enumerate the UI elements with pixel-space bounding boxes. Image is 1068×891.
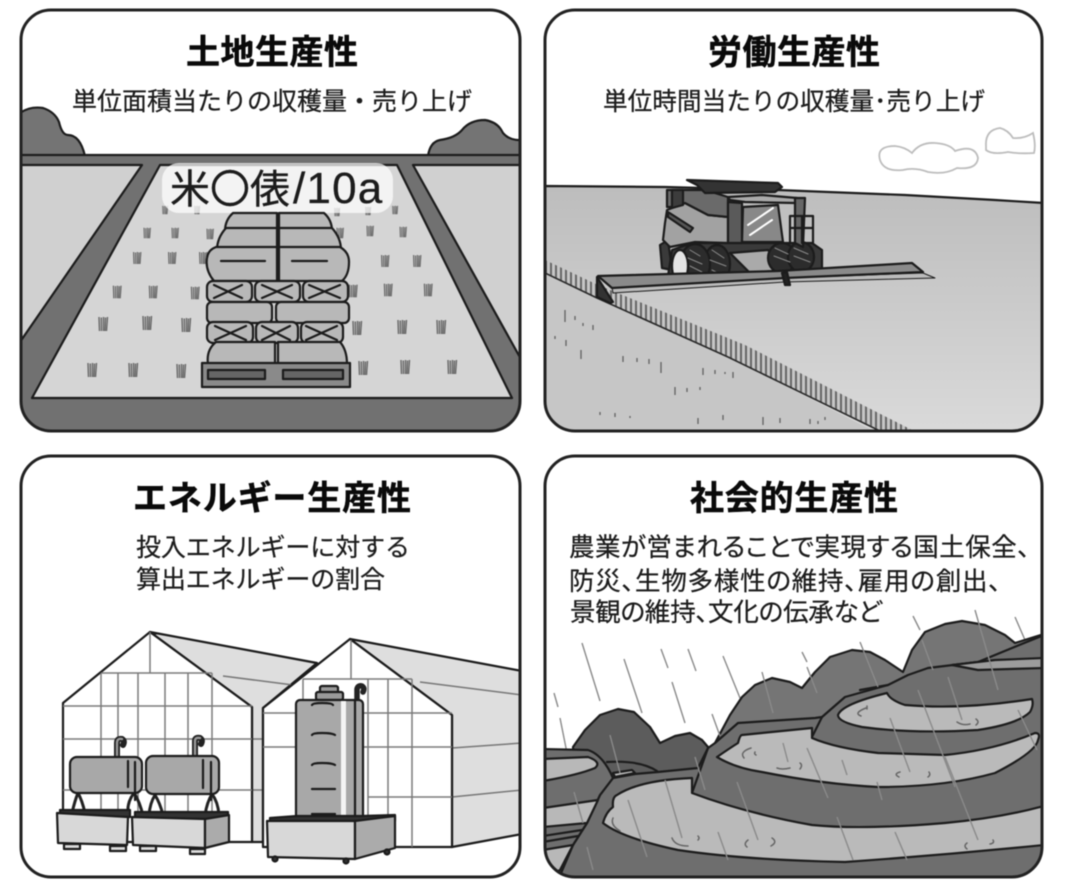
label: rice bales per 10a: 米〇俵 [170,168,290,212]
combine harvester [597,180,935,303]
rain behind hills [554,616,1025,763]
middle paddy [717,728,1039,787]
upper terrace sliver [952,658,1044,670]
icon: left tree bush [20,108,85,156]
tall fuel tank [267,686,395,864]
left paddy upper [543,757,597,781]
field [544,186,1044,434]
description: land productivity: 単位面積当たりの収穫量・売り上げ [72,88,472,116]
label background [162,163,393,213]
ground [20,155,522,433]
stubble edge [545,260,912,430]
icon: right tree bush [428,120,522,156]
description: energy productivity: 投入エネルギーに対する [136,534,410,562]
left greenhouse [63,632,317,842]
description: labor productivity: 単位時間当たりの収穫量･売り上げ [603,88,985,116]
left frame [660,240,672,270]
panel frame [21,456,520,877]
fuel tank centre [132,738,229,854]
illustration: greenhouses with fuel tanks [57,632,522,864]
right greenhouse [263,639,522,847]
panel: land productivity [20,10,522,433]
left paddy field [20,165,142,342]
bottom paddy [603,778,1044,862]
illustration: rice paddy with stacked rice bags [20,108,522,433]
icon: small cloud [986,128,1035,153]
engine housing [663,203,728,247]
central paddy field [32,165,512,398]
dark distant hill [573,709,712,780]
panel: social productivity [543,456,1044,880]
chassis [668,243,822,276]
panel frame [21,10,520,431]
description: social productivity: 景観の維持、文化の伝承など [570,599,883,627]
wheels [670,240,816,274]
left terrace line [543,830,582,842]
left paddy foot [543,845,573,880]
heading: labor productivity: 労働生産性 [708,34,880,72]
uncut foreground strip [546,336,870,430]
top paddy [838,693,1033,731]
label: rice bales per 10a: /10a [293,164,383,213]
grain hopper cover [687,180,782,193]
description: social productivity [569,534,1030,627]
illustration: terraced rice paddies in rain [543,610,1044,880]
water ripples [612,706,994,849]
panel frame [545,456,1042,877]
cab [728,202,742,243]
rice tufts [88,206,456,378]
description: social productivity: 農業が営まれることで実現する国土保全、 [569,534,1030,562]
panel: energy productivity [21,456,522,877]
left terraces [543,749,613,880]
heading: land productivity: 土地生産性 [186,34,358,72]
description: energy productivity: 算出エネルギーの割合 [136,566,385,594]
stack of rice bags on a pallet [202,213,350,387]
left paddy lower [543,800,598,827]
terrace walls [558,635,1044,880]
heading: social productivity: 社会的生産性 [690,480,898,518]
panel: labor productivity [544,10,1044,434]
ground stubble marks [555,310,825,425]
terrace wall edges [607,685,888,793]
panel frame [545,10,1042,431]
right paddy field [413,165,522,361]
small paddy sliver [613,770,635,777]
cutting header [612,273,935,293]
terraced hills [714,619,1042,742]
description: social productivity: 防災、生物多様性の維持、雇用の創出、 [569,568,1001,596]
illustration: combine harvester in a field [544,128,1044,434]
fuel tank left [57,739,143,851]
heading: energy productivity: エネルギー生産性 [133,480,411,518]
rain over terraces [574,610,1037,870]
icon: cloud [879,143,978,173]
description: energy productivity [136,534,410,594]
